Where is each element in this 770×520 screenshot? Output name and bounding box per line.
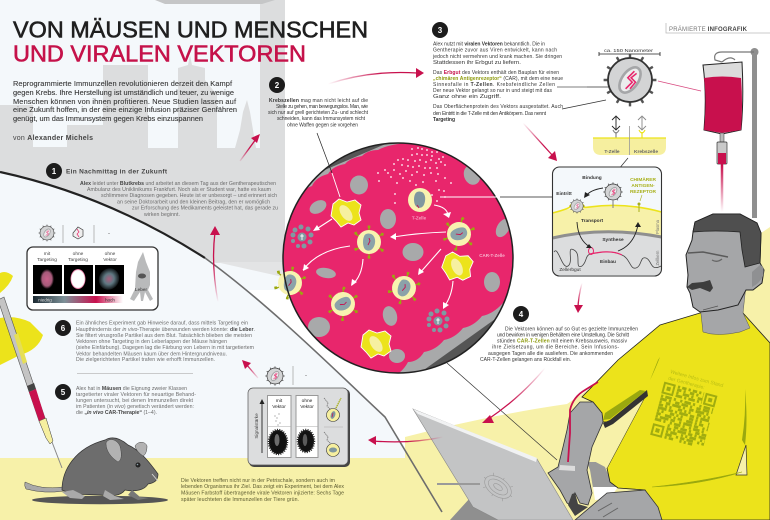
legend panel: liver imaging: mit: [44, 251, 51, 257]
floor text: Die Vektoren treffen nicht nur in der Petrischale, sondern auch im: [181, 478, 335, 484]
intro text: Menschen können von ihnen profitieren. Neue Studien lassen auf: [13, 97, 237, 106]
syringe and yellow blobs: [0, 272, 62, 468]
section 3: Der neue Vektor gelangt so nur in und steigt mit das: [433, 88, 552, 94]
section 3: Gentherapie zuvor aus Viren entwickelt, kann nach: [433, 48, 557, 54]
section 3: [432, 22, 563, 123]
T-cell and cancer cell labels: T-Zelle: [604, 149, 620, 155]
section 2: sich nur auf grell gerichteten Zu- und schlecht: [268, 110, 369, 116]
section 3: „chimären Antigenrezeptor“ (CAR), mit dem eine neue: [433, 76, 563, 82]
section 6: Die zielgerichteten Partikel trafen wie erhofft Immunzellen.: [76, 357, 215, 363]
section 6: Vektor behandelten Mäusen kaum über dem Hintergrundniveau.: [76, 352, 227, 358]
icon: virus emblem: [478, 468, 518, 506]
section 2: schneiden, kann das Immunsystem nicht: [277, 116, 366, 122]
section 4: und bewirken in wenigen Behältern eine Umstellung. Die Schritt: [497, 332, 630, 338]
white arrows: [303, 205, 453, 309]
section 2: [268, 77, 369, 128]
floor text: später leuchteten die Immunzellen der Tiere grün.: [181, 497, 299, 503]
section 5: Alex hat in Mäusen die Eignung zweier Klassen: [76, 386, 187, 392]
cell entry inset: Zellerbgut: [559, 267, 581, 273]
section 6: Haupthindernis der in vivo-Therapie überwunden werden könnte: die Leber.: [76, 327, 255, 333]
flow cytometry panel: -: [305, 373, 307, 379]
floor text: Mäusen Farbstoff übertragende virale Vektoren injizierte: Sechs Tage: [181, 490, 344, 496]
cell entry inset: REZEPTOR: [630, 189, 657, 195]
section 4: ausgegen Tagen alle die ausliefern. Die ankommenden: [488, 351, 613, 357]
section 1: wirken beginnt.: [144, 212, 180, 218]
cell entry inset: Eintritt: [556, 191, 572, 197]
icon: mouse silhouette: [130, 252, 153, 301]
floor text: [181, 478, 344, 503]
section 1: schlimmere Diagnosen gegeben. Heute ist er unbesorgt – und erinnert sich: [101, 193, 277, 199]
award label: [666, 23, 770, 33]
section 6: Vektoren ohne Targeting in den Leberlappen der Mäuse hängen: [76, 339, 227, 345]
section 2: Stelle zu gehen, man bewegungslos. Man, wie: [276, 104, 368, 110]
floor text: lebenden Organismus ihr Ziel. Das zeigt ein Experiment, bei dem Alex: [181, 484, 344, 490]
table behind arm: [587, 462, 618, 488]
CAR T cells: [272, 214, 480, 325]
legend panel: liver imaging: Vektor: [103, 257, 117, 263]
cancer cells: [331, 199, 474, 358]
IV bag: [658, 48, 758, 218]
section 3: Sinnesfalle in T-Zellen. Krebsfeindliche Zellen: [433, 82, 555, 88]
shirt text: der Gentherapie:: [667, 376, 705, 391]
legend panel: liver imaging: Targeting: [68, 257, 88, 263]
section 2: 2: [275, 81, 280, 90]
intro text: genügt, um das Immunsystem gegen Krebs einzuspannen: [13, 114, 203, 123]
section 2: Krebszellen mag man nicht leicht auf die: [269, 98, 368, 104]
neck and head: [700, 285, 750, 334]
cell entry inset: Zellkern: [655, 250, 660, 265]
section 5: 5: [61, 388, 66, 397]
flow cytometry panel: Signalstärke: [254, 413, 259, 439]
legend panel: liver imaging: niedrig: [38, 298, 52, 302]
section 4: 4: [519, 310, 524, 319]
laptop: [413, 409, 573, 520]
section 3: Ganz ohne ein Zugriff.: [433, 94, 501, 100]
virus diagram: [557, 54, 656, 143]
section 5: die „in vivo CAR-Therapie“ (1–4).: [76, 410, 157, 416]
section 3: Targeting: [433, 117, 455, 123]
section 4: CAR-T-Zellen gelangen ans Rückfall ein.: [480, 357, 571, 363]
title: [13, 16, 368, 67]
section 3: 3: [438, 26, 443, 35]
legend panel: liver imaging: [27, 225, 158, 310]
section 3: jedoch nicht vermehren und krank machen. Sie dringen: [432, 54, 562, 60]
cell entry inset: Bindung: [582, 175, 602, 181]
section 6: Sie filtert virusgroße Partikel aus dem Blut. Tatsächlich blieben die meisten: [76, 333, 252, 339]
title: UND VIRALEN VEKTOREN: [13, 41, 306, 67]
intro text: Reprogrammierte Immunzellen revolutionieren derzeit den Kampf: [13, 79, 233, 88]
section 5: [55, 384, 196, 416]
T-cell and cancer cell labels: Krebszelle: [634, 149, 658, 155]
flow cytometry panel: Vektor: [300, 404, 314, 410]
skyline: [0, 0, 285, 277]
section 6: Ein ähnliches Experiment gab Hinweise darauf, dass mittels Targeting ein: [76, 320, 248, 326]
section 3: Alex nutzt mit viralen Vektoren bekanntlich. Die in: [433, 42, 545, 48]
pink flow arrows: [210, 68, 583, 445]
shirt: [582, 313, 770, 520]
white virus dots: [378, 148, 451, 203]
flow cytometry panel: ohne: [302, 398, 313, 404]
section 1: 1: [52, 167, 57, 176]
section 1: Ein Nachmittag in der Zukunft: [66, 168, 168, 176]
T-cell and cancer cell labels: [593, 126, 666, 155]
cell entry inset: [552, 167, 662, 276]
main blood vessel circle: [270, 140, 520, 380]
T cell: T-Zelle: [412, 216, 427, 220]
title: VON MÄUSEN UND MENSCHEN: [13, 16, 368, 42]
section 5: lungen untersucht, bei denen Immunzellen direkt: [76, 398, 194, 404]
flow cytometry panel: [248, 366, 350, 467]
intro text: gegen Krebs. Ihre Herstellung ist umständlich und teuer, zu wenige: [13, 88, 234, 97]
connector lines: [317, 133, 628, 460]
scale label: ca. 150 Nanometer: [604, 48, 653, 54]
cell entry inset: Synthese: [602, 237, 624, 243]
dead cells: [290, 224, 450, 332]
section 3: Das Oberflächenprotein des Vektors ausgestattet. Auch: [433, 104, 563, 110]
mouse: [25, 438, 168, 504]
gray ovals: [307, 163, 513, 363]
cell entry inset: Einbau: [600, 259, 616, 265]
flow cytometry panel: Vektor: [272, 404, 286, 410]
vessel wall top left: [308, 144, 400, 188]
section 3: den Eintritt in die T-Zelle mit den Antikörpern. Das nennt: [433, 111, 547, 117]
scale label: [599, 48, 660, 56]
section 4: [480, 306, 638, 363]
section 4: stünden CAR-T-Zellen mit einem Krebsausweis, massiv: [497, 338, 628, 344]
shirt text: Weitere Infos zum Stand: [669, 369, 724, 389]
byline: von Alexander Michels: [13, 135, 93, 142]
section 3: Stattdessen ihr Erbgut zu liefern.: [433, 60, 521, 66]
cell entry inset: ANTIGEN-: [631, 183, 655, 189]
man: [548, 214, 770, 520]
section 6: [55, 320, 255, 363]
legend panel: liver imaging: Targeting: [37, 257, 57, 263]
infusion tube: [568, 382, 598, 462]
section 1: [46, 163, 278, 218]
section 2: ohne Waffen gegen sie vorgehen: [287, 122, 358, 128]
T cell: [408, 188, 432, 220]
cell entry inset: Plasma: [655, 219, 660, 234]
section 3: Das Erbgut des Vektors enthält den Bauplan für einen: [433, 70, 559, 76]
curve divider: [0, 172, 442, 512]
award label: PRÄMIERTE INFOGRAFIK: [669, 26, 748, 33]
section 5: im Patienten (in vivo) genetisch verändert werden:: [76, 404, 194, 410]
section 6: 6: [61, 324, 66, 333]
arm and hands: [548, 402, 603, 507]
section 5: targetierter viraler Vektoren für neuartige Behand-: [76, 392, 196, 398]
intro text: eine Zukunft hoffen, in der eine einzige Infusion präziser Genfähren: [13, 105, 237, 114]
legend panel: liver imaging: ohne: [105, 251, 116, 257]
section 1: an seine Doktorarbeit und den kleinen Beitrag, den er womöglich: [117, 200, 270, 206]
cell entry inset: CHIMÄRER: [630, 176, 656, 183]
intro text: [13, 79, 237, 123]
section 1: zur Erforschung des Medikaments geleistet hat, das gerade zu: [132, 206, 278, 212]
section 4: Die Vektoren können auf so Gut es gezielte Immunzellen: [505, 326, 638, 332]
section 6: (siehe Einfärbung). Dagegen lag die Färbung von Lebern in mit targetiertem: [76, 345, 254, 351]
section 4: ihre Zielsetzung, um die Bereiche. Sein Infusions-: [492, 344, 619, 350]
legend panel: liver imaging: hoch: [105, 298, 115, 302]
QR code: [651, 383, 717, 448]
legend panel: liver imaging: Leber: [135, 287, 147, 292]
main blood vessel circle: CAR-T-Zelle: [479, 253, 505, 258]
legend panel: liver imaging: ohne: [73, 251, 84, 257]
section 1: Ambulanz des Uniklinikums Frankfurt. Noch als er Student war, hatte es kaum: [87, 187, 271, 193]
legend panel: liver imaging: -: [108, 231, 110, 237]
flow cytometry panel: mit: [276, 398, 283, 404]
section 1: Alex leidet unter Blutkrebs und arbeitet an diesem Tag aus der Gentherapeutischen: [80, 181, 276, 187]
cell entry inset: Transport: [581, 218, 603, 224]
vessel wall bottom right: [400, 303, 503, 372]
